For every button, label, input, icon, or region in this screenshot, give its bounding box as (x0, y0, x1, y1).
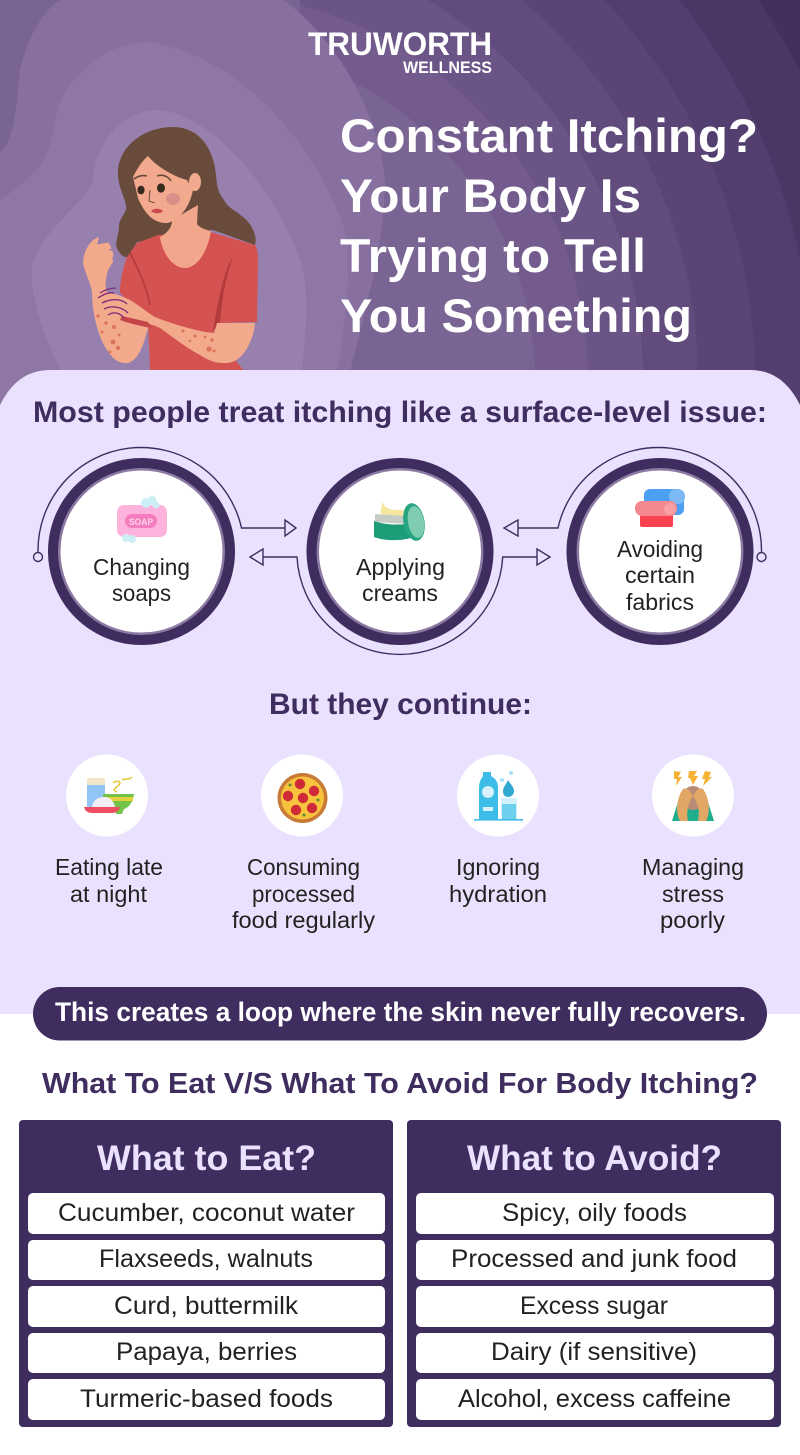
circle: avoiding certain fabrics (566, 458, 754, 645)
label (642, 854, 744, 933)
fingers (97, 243, 113, 266)
panel heading: What to Eat? (97, 1139, 316, 1178)
item: ignoring hydration (449, 754, 547, 907)
label: stress (662, 881, 724, 907)
list rows: Cucumber, coconut water (58, 1199, 355, 1227)
hair (116, 127, 256, 257)
label: Ignoring (456, 854, 540, 880)
label (356, 554, 445, 606)
label: soaps (112, 580, 171, 606)
label: certain (625, 562, 695, 588)
item: eating late at night (55, 754, 163, 907)
label: processed (252, 881, 355, 907)
illustration: woman scratching arm (83, 127, 258, 370)
list rows: Turmeric-based foods (80, 1385, 333, 1413)
panel heading: What to Avoid? (467, 1139, 722, 1178)
logo subtitle: WELLNESS (403, 58, 492, 77)
list rows: Dairy (if sensitive) (491, 1338, 697, 1366)
list rows: Processed and junk food (451, 1245, 737, 1273)
raised arm and hand (83, 237, 150, 363)
callout pill (33, 987, 767, 1040)
label (55, 854, 163, 907)
ear (189, 173, 201, 191)
title: Constant Itching? (340, 109, 758, 162)
label: Avoiding (617, 536, 703, 562)
panel: what to avoid (407, 1120, 781, 1427)
blush (166, 193, 180, 205)
icon: pizza (278, 773, 328, 823)
item: consuming processed food (232, 754, 376, 933)
scratching arm (100, 293, 255, 363)
list rows (416, 1193, 774, 1420)
label: hydration (449, 881, 547, 907)
rash spots (96, 314, 216, 354)
list rows (28, 1193, 385, 1420)
label (617, 536, 703, 615)
label: creams (362, 580, 438, 606)
red shirt (120, 232, 258, 370)
logo wordmark: TRUWORTH (308, 26, 492, 62)
title: Your Body Is (340, 169, 641, 222)
icon: cream jar (374, 501, 428, 543)
label: Consuming (247, 854, 360, 880)
icon: water bottle and glass (474, 771, 523, 821)
label (93, 554, 190, 606)
nose (149, 190, 155, 203)
icon: meal (84, 777, 134, 814)
circle: applying creams (306, 458, 494, 645)
list rows: Excess sugar (520, 1292, 668, 1320)
label: Managing (642, 854, 744, 880)
icon: soap (117, 496, 167, 543)
list rows: Spicy, oily foods (502, 1199, 687, 1227)
brows (134, 175, 171, 181)
panel: what to eat (19, 1120, 393, 1427)
label: Changing (93, 554, 190, 580)
list rows: Curd, buttermilk (114, 1292, 299, 1320)
scratch marks (98, 288, 128, 318)
title (340, 109, 758, 342)
list rows: Alcohol, excess caffeine (458, 1385, 731, 1413)
title: Trying to Tell (340, 229, 646, 282)
label (232, 854, 376, 933)
icon: fabric rolls (635, 489, 685, 527)
icon: stressed person (672, 771, 714, 821)
lavender panel (0, 370, 800, 1014)
icon: soap: SOAP (129, 517, 153, 527)
item: managing stress poorly (642, 754, 744, 933)
label: Eating late (55, 854, 163, 880)
mouth (151, 209, 163, 213)
heading: but they continue: But they continue: (269, 688, 532, 721)
title: You Something (340, 289, 692, 342)
label (449, 854, 547, 907)
list rows: Flaxseeds, walnuts (99, 1245, 313, 1273)
label: fabrics (626, 589, 694, 615)
list rows: Papaya, berries (116, 1338, 297, 1366)
neck and chest (160, 205, 211, 268)
label: Applying (356, 554, 445, 580)
face (133, 156, 193, 223)
logo (308, 26, 492, 77)
label: food regularly (232, 907, 376, 933)
label: at night (70, 881, 148, 907)
label: poorly (660, 907, 726, 933)
heading: what to eat vs avoid: What To Eat V/S What To Avoid For Body Itching? (42, 1068, 758, 1100)
circle: changing soaps (48, 458, 235, 645)
eyes (137, 186, 145, 194)
hero background (0, 0, 800, 405)
heading: surface-level issue: Most people treat itching like a surface-level issue: (33, 396, 767, 429)
sleeve shadow (120, 316, 152, 328)
callout pill: This creates a loop where the skin never fully recovers. (55, 997, 746, 1027)
connector arcs and arrows (34, 448, 766, 654)
